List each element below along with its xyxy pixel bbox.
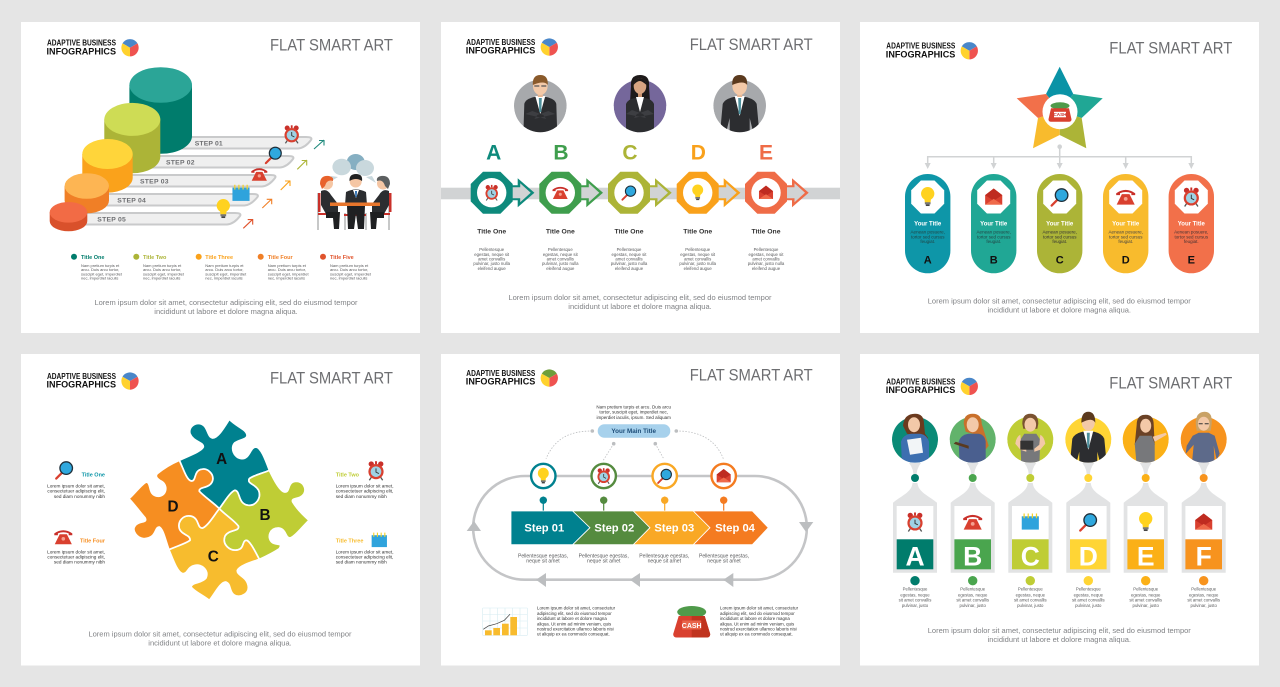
pill B: B bbox=[990, 254, 998, 266]
callout title three bbox=[336, 533, 394, 565]
pill A: Your Title bbox=[914, 222, 942, 228]
callout title two: Lorem ipsum dolor sit amet, bbox=[336, 484, 394, 489]
chevron step 02: Step 02 bbox=[594, 522, 634, 534]
pill A: A bbox=[924, 254, 932, 266]
legend item two: nec, imperdiet iaculis bbox=[143, 276, 180, 281]
legend item one: Nam pretium turpis et bbox=[81, 263, 120, 268]
letters: B bbox=[553, 141, 569, 164]
card A: sit amet convallis bbox=[899, 598, 931, 603]
card F: Pellentesque bbox=[1191, 587, 1217, 592]
person portrait bbox=[1007, 414, 1053, 466]
callout title four: sed diam nonummy nibh bbox=[54, 560, 105, 565]
chevron step 01 bbox=[511, 511, 590, 545]
callout title three: Title Three bbox=[336, 538, 363, 544]
callout title three: Lorem ipsum dolor sit amet, bbox=[336, 549, 394, 554]
logo: ADAPTIVE BUSINESS bbox=[466, 369, 536, 378]
logo: ADAPTIVE BUSINESS bbox=[47, 372, 117, 381]
pill B: tortor sed cursus bbox=[977, 234, 1011, 239]
legend item three: nec, imperdiet iaculis bbox=[205, 276, 243, 281]
pill C bbox=[1037, 174, 1082, 273]
pill C: tortor sed cursus bbox=[1043, 234, 1077, 239]
ring icon: magnifier bbox=[652, 464, 677, 511]
callout title four: consectetuer adipiscing elit, bbox=[47, 554, 105, 559]
caption E: amet convallis bbox=[752, 256, 780, 262]
caption E: pulvinar, justo nulla bbox=[748, 261, 785, 266]
card B: pulvinar, justo bbox=[960, 603, 986, 608]
pill B: Aenean posuere, bbox=[977, 229, 1011, 234]
callout title one bbox=[47, 462, 105, 499]
pill E: Aenean posuere, bbox=[1174, 229, 1208, 234]
legend item four: suscipit eget, imperdiet bbox=[268, 271, 309, 276]
cylinder 1 bbox=[129, 67, 192, 154]
logo bbox=[466, 369, 558, 388]
person portrait bbox=[1065, 412, 1112, 463]
main title text: Nam pretium turpis et arcu. Duis arcu bbox=[596, 405, 671, 410]
step icons bbox=[217, 125, 299, 218]
step captions bbox=[518, 553, 749, 565]
ring icon: bulb bbox=[531, 464, 556, 511]
callout title three: consectetuer adipiscing elit, bbox=[336, 554, 393, 559]
ring icon: clock bbox=[592, 464, 616, 511]
heading: FLAT SMART ART bbox=[690, 35, 813, 54]
legend item three: Nam pretium turpis et bbox=[205, 263, 244, 268]
callout title four: Title Four bbox=[80, 538, 106, 544]
caption A: Pellentesque bbox=[479, 247, 505, 252]
card B: sit amet convallis bbox=[956, 598, 989, 603]
gray band bbox=[441, 188, 840, 199]
logo bbox=[886, 377, 978, 396]
panel: step loop bbox=[441, 354, 840, 666]
step bars bbox=[65, 137, 311, 224]
heading: FLAT SMART ART bbox=[270, 369, 393, 388]
pill D: feugiat. bbox=[1118, 239, 1133, 244]
step captions: neque sit amet bbox=[707, 559, 741, 565]
letters: C bbox=[622, 141, 638, 164]
legend item two: suscipit eget, imperdiet bbox=[143, 271, 185, 276]
callout title three: sed diam nonummy nibh bbox=[336, 560, 387, 565]
panel: puzzle bbox=[21, 354, 420, 666]
chart text: adipiscing elit, sed do eiusmod tempor bbox=[537, 611, 612, 616]
panel: stacked cylinders steps bbox=[21, 22, 420, 333]
person portrait bbox=[950, 414, 996, 466]
logo: INFOGRAPHICS bbox=[46, 46, 116, 57]
caption A: egestas, neque sit bbox=[474, 252, 510, 257]
caption E bbox=[748, 228, 785, 271]
chevron step 03 bbox=[633, 511, 710, 545]
icon: bar chart bbox=[483, 608, 527, 635]
caption A: eleifend augue bbox=[478, 266, 506, 271]
card D: D bbox=[1079, 541, 1098, 571]
card D: Pellentesque bbox=[1076, 587, 1101, 592]
logo: INFOGRAPHICS bbox=[46, 380, 116, 391]
card E: sit amet convallis bbox=[1129, 598, 1162, 603]
step node C bbox=[608, 172, 672, 214]
legend item four: Nam pretium turpis et bbox=[268, 263, 307, 268]
step captions: neque sit amet bbox=[648, 559, 682, 565]
logo: INFOGRAPHICS bbox=[466, 46, 535, 57]
cash text: Lorem ipsum dolor sit amet, consectetur bbox=[720, 606, 799, 611]
step node E bbox=[745, 172, 809, 214]
callout title one: Title One bbox=[82, 473, 105, 479]
caption E: Pellentesque bbox=[754, 247, 779, 252]
main title text: imperdiet iaculis, ipsum. Sed aliquam bbox=[597, 415, 671, 420]
chevron step 03: Step 03 bbox=[654, 522, 694, 534]
cylinder 4 bbox=[65, 173, 109, 213]
connector tree bbox=[925, 144, 1194, 169]
legend item one: arcu. Duis arcu tortor, bbox=[81, 267, 119, 272]
panel: timeline with people bbox=[441, 22, 840, 333]
heading: FLAT SMART ART bbox=[690, 365, 813, 384]
legend item one: suscipit eget, imperdiet bbox=[81, 271, 123, 276]
pill B: feugiat. bbox=[986, 239, 1001, 244]
legend item two: Title Two bbox=[143, 255, 167, 261]
callout title one: sed diam nonummy nibh bbox=[54, 494, 105, 499]
icon: cash bag: CASH bbox=[682, 623, 702, 630]
step captions: Pellentesque egestas, bbox=[699, 553, 749, 559]
letters: D bbox=[691, 141, 706, 164]
legend item three: suscipit eget, imperdiet bbox=[205, 271, 247, 276]
legend item one: Title One bbox=[81, 255, 104, 261]
footer text: Lorem ipsum dolor sit amet, consectetur adipiscing elit, sed do eiusmod tempor bbox=[94, 298, 358, 307]
star bbox=[1017, 67, 1103, 148]
callout title one: Lorem ipsum dolor sit amet, bbox=[47, 484, 105, 489]
ring icon: envelope bbox=[712, 464, 736, 511]
puzzle letters: C bbox=[208, 548, 219, 566]
person portrait bbox=[1181, 412, 1227, 466]
caption C: egestas, neque sit bbox=[612, 252, 647, 257]
card F: egestas, neque bbox=[1189, 592, 1219, 597]
puzzle letters: A bbox=[216, 451, 227, 468]
cash text: incididunt ut labore et dolore magna bbox=[720, 616, 790, 621]
card A: pulvinar, justo bbox=[902, 603, 929, 608]
callout title two: sed diam nonummy nibh bbox=[336, 494, 387, 499]
legend item five: arcu. Duis arcu tortor, bbox=[330, 267, 368, 272]
logo: ADAPTIVE BUSINESS bbox=[47, 39, 117, 48]
legend item two bbox=[133, 254, 185, 281]
pill D: Aenean posuere, bbox=[1109, 229, 1143, 234]
legend item four: nec, imperdiet iaculis bbox=[268, 276, 305, 281]
caption E: eleifend augue bbox=[752, 266, 781, 271]
card E bbox=[1123, 415, 1169, 608]
card D bbox=[1065, 412, 1111, 608]
card D: egestas, neque bbox=[1074, 592, 1104, 597]
caption A: pulvinar, justo nulla bbox=[473, 261, 511, 266]
heading: FLAT SMART ART bbox=[270, 36, 393, 55]
piece C bbox=[169, 509, 259, 600]
chevron step 01: Step 01 bbox=[524, 522, 564, 534]
person: man bbox=[713, 75, 766, 136]
person: woman bbox=[614, 75, 666, 136]
card B bbox=[950, 414, 996, 608]
legend item one bbox=[71, 254, 123, 281]
caption D bbox=[679, 228, 717, 271]
step labels: STEP 03 bbox=[140, 178, 169, 185]
heading: FLAT SMART ART bbox=[1109, 38, 1232, 57]
icon: cash bag: CASH bbox=[1053, 112, 1067, 117]
footer text: Lorem ipsum dolor sit amet, consectetur adipiscing elit, sed do eiusmod tempor bbox=[508, 293, 772, 302]
callout title four: Lorem ipsum dolor sit amet, bbox=[47, 549, 105, 554]
card B: Pellentesque bbox=[960, 587, 986, 592]
logo: ADAPTIVE BUSINESS bbox=[466, 38, 536, 47]
caption C: Title One bbox=[615, 228, 644, 235]
card E: pulvinar, justo bbox=[1133, 603, 1159, 608]
puzzle letters: B bbox=[259, 507, 271, 524]
pill B bbox=[971, 174, 1016, 273]
caption B: Pellentesque bbox=[548, 247, 573, 252]
pill A: feugiat. bbox=[920, 239, 935, 244]
legend item five: Nam pretium turpis et bbox=[330, 263, 369, 268]
pill E bbox=[1169, 174, 1214, 273]
logo bbox=[46, 372, 139, 391]
caption A: Title One bbox=[477, 228, 506, 235]
caption D: Pellentesque bbox=[685, 247, 711, 252]
card F: pulvinar, justo bbox=[1191, 603, 1217, 608]
pill D: D bbox=[1122, 254, 1130, 266]
pill E: tortor sed cursus bbox=[1175, 234, 1209, 239]
piece B bbox=[219, 470, 309, 559]
legend item three bbox=[196, 254, 247, 281]
footer text: incididunt ut labore et dolore magna aliqua. bbox=[988, 305, 1131, 314]
heading: FLAT SMART ART bbox=[1109, 374, 1232, 393]
step labels: STEP 01 bbox=[195, 140, 223, 147]
card D: pulvinar, justo bbox=[1075, 603, 1102, 608]
step captions: neque sit amet bbox=[526, 559, 560, 565]
icon: cash bag bbox=[673, 606, 710, 638]
callout title two: Title Two bbox=[336, 473, 360, 479]
legend item four bbox=[258, 254, 309, 281]
dotted connectors bbox=[546, 429, 723, 460]
caption B: amet convallis bbox=[547, 256, 574, 262]
meeting illustration bbox=[318, 154, 392, 230]
logo: INFOGRAPHICS bbox=[466, 377, 535, 388]
legend item three: arcu. Duis arcu tortor, bbox=[205, 267, 244, 272]
caption C: pulvinar, justo nulla bbox=[611, 261, 648, 266]
step node D bbox=[677, 172, 740, 214]
pill C: feugiat. bbox=[1052, 239, 1067, 244]
caption B: eleifend augue bbox=[546, 266, 575, 271]
card C: pulvinar, justo bbox=[1017, 603, 1044, 608]
diagonal arrows bbox=[243, 140, 324, 228]
main title pill: Your Main Title bbox=[611, 428, 656, 435]
card F: F bbox=[1196, 541, 1212, 571]
legend item three: Title Three bbox=[205, 255, 233, 261]
card A: A bbox=[905, 541, 925, 571]
footer text: incididunt ut labore et dolore magna aliqua. bbox=[568, 302, 712, 311]
chevron step 04 bbox=[693, 511, 768, 545]
chart text: incididunt ut labore et dolore magna bbox=[537, 616, 607, 621]
legend item one: nec, imperdiet iaculis bbox=[81, 276, 118, 281]
caption B bbox=[542, 228, 579, 271]
person portrait bbox=[1123, 415, 1169, 466]
cash text: ut aliquip ex ea commodo consequat. bbox=[720, 632, 793, 637]
puzzle letters: D bbox=[167, 498, 179, 516]
legend bbox=[71, 254, 372, 281]
card C: egestas, neque bbox=[1016, 592, 1046, 597]
step node A bbox=[471, 172, 534, 214]
chart text: nostrud exercitation ullamco laboris nisi bbox=[537, 626, 614, 631]
callout title one: consectetuer adipiscing elit, bbox=[47, 489, 105, 494]
step labels: STEP 04 bbox=[117, 197, 146, 204]
main title text: tortor, suscipit eget, imperdiet nec, bbox=[599, 410, 668, 415]
pill D bbox=[1103, 174, 1148, 273]
card A bbox=[892, 414, 938, 608]
caption E: egestas, neque sit bbox=[749, 252, 784, 257]
pill E: E bbox=[1188, 254, 1195, 266]
panel: star hierarchy bbox=[860, 22, 1259, 333]
card E: E bbox=[1137, 541, 1155, 571]
card B: egestas, neque bbox=[958, 592, 988, 597]
card E: Pellentesque bbox=[1133, 587, 1159, 592]
person portrait bbox=[892, 414, 938, 466]
footer text: incididunt ut labore et dolore magna aliqua. bbox=[148, 638, 292, 647]
step node B bbox=[539, 172, 603, 214]
caption B: Title One bbox=[546, 228, 575, 235]
logo: ADAPTIVE BUSINESS bbox=[886, 377, 956, 386]
caption D: eleifend augue bbox=[684, 266, 712, 271]
pill D: tortor sed cursus bbox=[1109, 234, 1143, 239]
card A: Pellentesque bbox=[903, 587, 928, 592]
legend item two: Nam pretium turpis et bbox=[143, 263, 182, 268]
letters: A bbox=[486, 141, 501, 164]
pill A bbox=[905, 174, 950, 273]
puzzle letters bbox=[167, 451, 271, 566]
loop track bbox=[467, 476, 813, 587]
caption C: amet convallis bbox=[615, 256, 643, 262]
chart text: ut aliquip ex ea commodo consequat. bbox=[537, 632, 610, 637]
card C: Pellentesque bbox=[1018, 587, 1043, 592]
step captions: neque sit amet bbox=[587, 559, 621, 565]
callout title two: consectetuer adipiscing elit, bbox=[336, 489, 393, 494]
main title pill bbox=[598, 424, 670, 438]
card E: egestas, neque bbox=[1131, 592, 1161, 597]
cash text: aliqua. Ut enim ad minim veniam, quis bbox=[720, 621, 795, 626]
pill A: tortor sed cursus bbox=[911, 234, 945, 239]
legend item five: nec, imperdiet iaculis bbox=[330, 276, 367, 281]
pill D: Your Title bbox=[1112, 222, 1140, 228]
logo: ADAPTIVE BUSINESS bbox=[886, 42, 956, 51]
piece A bbox=[179, 419, 269, 509]
caption B: egestas, neque sit bbox=[543, 252, 579, 257]
step labels bbox=[97, 140, 223, 223]
legend item four: Title Four bbox=[268, 255, 294, 261]
legend item five bbox=[320, 254, 372, 281]
card C: C bbox=[1021, 541, 1040, 571]
card C: sit amet convallis bbox=[1014, 598, 1047, 603]
caption C bbox=[611, 228, 648, 271]
cylinder 3 bbox=[82, 139, 133, 193]
piece D bbox=[129, 460, 219, 550]
pill E: Your Title bbox=[1178, 222, 1206, 228]
card F bbox=[1181, 412, 1227, 608]
chart text: aliqua. Ut enim ad minim veniam, quis bbox=[537, 621, 612, 626]
logo: INFOGRAPHICS bbox=[886, 385, 955, 396]
caption D: egestas, neque sit bbox=[680, 252, 716, 257]
caption D: Title One bbox=[683, 228, 712, 235]
caption A bbox=[473, 228, 511, 271]
step labels: STEP 05 bbox=[97, 216, 126, 223]
cash text: adipiscing elit, sed do eiusmod tempor bbox=[720, 611, 795, 616]
callout title four bbox=[47, 530, 106, 565]
legend item five: suscipit eget, imperdiet bbox=[330, 271, 372, 276]
footer text: Lorem ipsum dolor sit amet, consectetur adipiscing elit, sed do eiusmod tempor bbox=[928, 626, 1191, 635]
chart text: Lorem ipsum dolor sit amet, consectetur bbox=[537, 606, 616, 611]
caption B: pulvinar, justo nulla bbox=[542, 261, 579, 266]
legend item two: arcu. Duis arcu tortor, bbox=[143, 267, 181, 272]
caption C: Pellentesque bbox=[617, 247, 642, 252]
caption D: pulvinar, justo nulla bbox=[679, 261, 717, 266]
pill C: C bbox=[1056, 254, 1064, 266]
logo: INFOGRAPHICS bbox=[886, 49, 955, 60]
panel: people cards bbox=[860, 354, 1259, 666]
step captions: Pellentesque egestas, bbox=[518, 553, 568, 559]
footer text: incididunt ut labore et dolore magna aliqua. bbox=[988, 635, 1131, 644]
cylinder 5 bbox=[50, 202, 87, 231]
pill C: Your Title bbox=[1046, 222, 1074, 228]
card D: sit amet convallis bbox=[1072, 598, 1105, 603]
card B: B bbox=[963, 541, 982, 571]
logo bbox=[886, 42, 978, 60]
footer text: Lorem ipsum dolor sit amet, consectetur adipiscing elit, sed do eiusmod tempor bbox=[88, 629, 352, 638]
person: man with glasses bbox=[514, 75, 567, 136]
puzzle bbox=[129, 419, 309, 600]
card F: sit amet convallis bbox=[1187, 598, 1220, 603]
caption D: amet convallis bbox=[684, 256, 711, 262]
logo bbox=[46, 39, 139, 57]
card A: egestas, neque bbox=[900, 592, 930, 597]
pill E: feugiat. bbox=[1184, 239, 1199, 244]
caption E: Title One bbox=[752, 228, 781, 235]
chevron step 04: Step 04 bbox=[715, 522, 756, 534]
legend item four: arcu. Duis arcu tortor, bbox=[268, 267, 306, 272]
step captions: Pellentesque egestas, bbox=[579, 553, 629, 559]
logo bbox=[466, 38, 558, 57]
legend item five: Title Five bbox=[330, 255, 354, 261]
step captions: Pellentesque egestas, bbox=[639, 553, 689, 559]
caption A: amet convallis bbox=[478, 256, 505, 262]
footer text: incididunt ut labore et dolore magna aliqua. bbox=[154, 307, 298, 316]
pill C: Aenean posuere, bbox=[1043, 229, 1077, 234]
card C bbox=[1007, 414, 1053, 608]
cylinder 2 bbox=[104, 103, 160, 173]
callout title two bbox=[336, 461, 394, 499]
letters: E bbox=[759, 141, 773, 164]
cash text: nostrud exercitation ullamco laboris nisi bbox=[720, 626, 797, 631]
pill A: Aenean posuere, bbox=[911, 229, 945, 234]
footer text: Lorem ipsum dolor sit amet, consectetur adipiscing elit, sed do eiusmod tempor bbox=[928, 296, 1191, 305]
step labels: STEP 02 bbox=[166, 159, 195, 166]
chevron step 02 bbox=[573, 511, 650, 545]
pill B: Your Title bbox=[980, 222, 1008, 228]
caption C: eleifend augue bbox=[615, 266, 644, 271]
letters bbox=[486, 141, 773, 164]
